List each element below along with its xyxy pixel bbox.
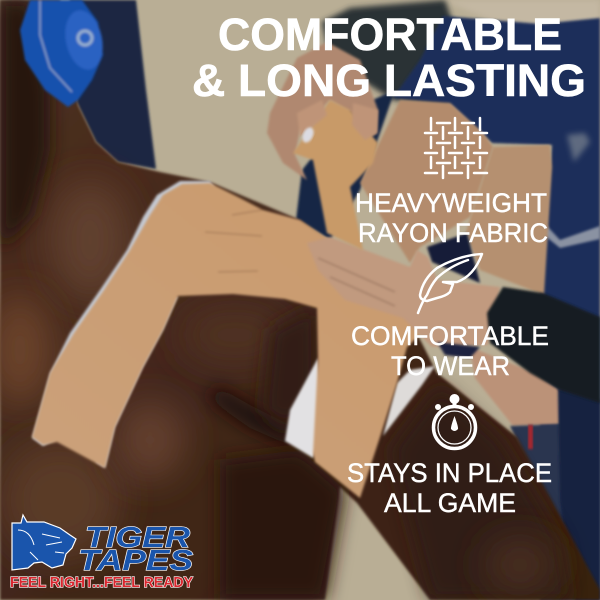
armpit crease (210, 385, 300, 450)
upper arm tone (180, 305, 290, 365)
finger gaps (318, 258, 395, 306)
lower chest tone (0, 440, 120, 560)
feature: stays in place all game (347, 458, 552, 518)
headphone trim (40, 0, 72, 92)
title (192, 9, 586, 106)
kinesiology tape (32, 183, 420, 498)
headphone outer face (60, 7, 108, 73)
wordmark: TIGER (85, 522, 190, 554)
white underwrap right (383, 366, 435, 436)
wordmark (78, 522, 194, 577)
jacket lower panel (558, 388, 600, 600)
pale top right background (443, 0, 600, 40)
right finger (352, 103, 378, 140)
icon: tiger head (12, 515, 76, 570)
white edge on strip (96, 296, 178, 468)
feature: comfortable to wear: TO WEAR (391, 351, 510, 381)
tiger face markings (18, 530, 64, 560)
dark sleeve at top (322, 0, 452, 105)
therapist upper hands (267, 42, 378, 180)
white underwrap edge (32, 181, 215, 446)
icon: stopwatch (434, 394, 476, 448)
therapist pale leg lower (470, 347, 560, 426)
gap between limbs (427, 233, 480, 283)
neck tone (50, 180, 130, 300)
jacket stripes (544, 225, 600, 248)
icon: woven fabric (425, 118, 487, 178)
navy clothing behind the tape roll (296, 90, 395, 240)
upper chest tone (0, 295, 52, 405)
tape roll and strip (293, 100, 378, 250)
white underwrap near armpit (285, 358, 325, 458)
therapist jacket (393, 16, 600, 600)
wordmark: TAPES (78, 545, 194, 577)
logo: Tiger Tapes (10, 515, 194, 591)
feature: comfortable to wear (351, 321, 549, 381)
icon: feather (418, 254, 482, 313)
tape roll core (300, 126, 316, 144)
dark hair and beard (0, 0, 50, 250)
forearm highlight (485, 537, 555, 593)
torso dark right (220, 450, 345, 600)
navy lower trousers (510, 424, 562, 530)
headphone cup (20, 0, 103, 107)
tape wrinkles (205, 210, 262, 272)
feature: stays in place all game: STAYS IN PLACE (347, 458, 552, 488)
finger over roll (297, 100, 327, 137)
navy curtain behind athlete (60, 0, 156, 169)
upper arm dark right (262, 305, 317, 430)
feature: comfortable to wear: COMFORTABLE (351, 321, 549, 351)
forearm shading (390, 385, 570, 600)
headphone (20, 0, 108, 107)
therapist forearm behind (360, 100, 493, 263)
tagline: FEEL RIGHT...FEEL READY (10, 574, 193, 591)
therapist palm on tape (307, 237, 500, 347)
small dark patch below wrist (437, 342, 480, 358)
pectoral highlight (115, 400, 185, 480)
feature: stays in place all game: ALL GAME (384, 488, 516, 518)
feature: heavyweight rayon fabric (355, 188, 548, 248)
feature: heavyweight rayon fabric: RAYON FABRIC (358, 218, 548, 248)
headphone logo (78, 31, 92, 45)
feature: heavyweight rayon fabric: HEAVYWEIGHT (355, 188, 547, 218)
black sleeve (487, 287, 600, 403)
therapist second limb (466, 145, 552, 295)
title: & LONG LASTING (192, 55, 586, 106)
title: COMFORTABLE (218, 9, 562, 60)
red stripe (528, 425, 533, 449)
